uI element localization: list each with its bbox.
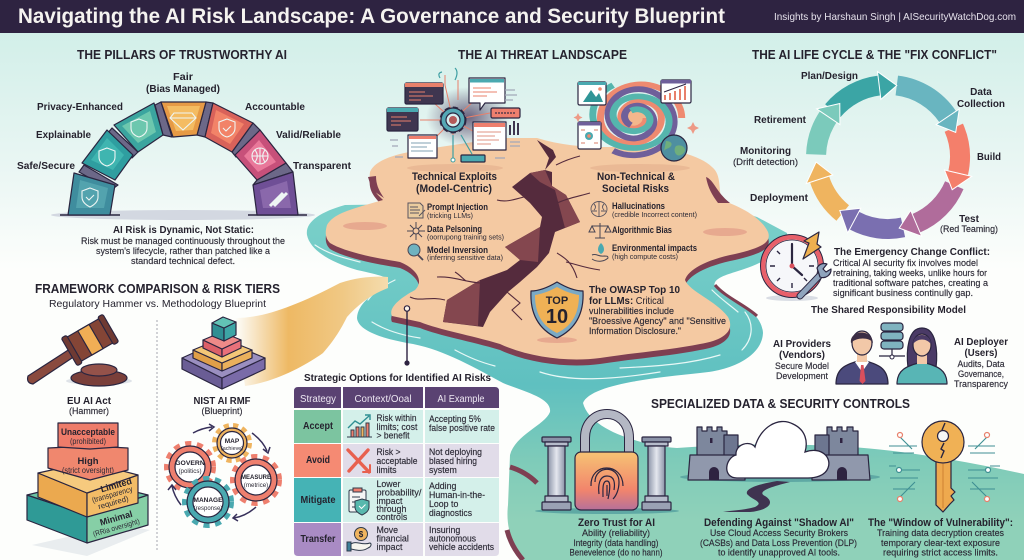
shadow AI text: Defending Against "Shadow AI"	[704, 517, 854, 529]
tier: minimal: (RRia oversight)	[92, 517, 141, 539]
row: mitigate: Mitigate	[300, 495, 336, 506]
AI deployer text	[954, 336, 1009, 389]
zero trust text: Ability (reliability)	[582, 528, 650, 538]
shadow AI text: to identify unapproved AI tools.	[718, 548, 840, 558]
heading: shared responsibility: The Shared Responsibility Model	[811, 304, 966, 316]
column: societal risks	[589, 171, 697, 261]
tier: limited: Limited	[99, 476, 133, 494]
icon: server database	[879, 323, 905, 359]
item: environmental impacts: Environmental impacts	[612, 243, 697, 253]
row: mitigate: Human-in-the-	[429, 490, 485, 500]
icon: top 10 shield	[531, 282, 583, 343]
row: avoid	[294, 444, 499, 477]
life cycle stage labels: Data	[970, 87, 992, 98]
tier: minimal	[27, 480, 148, 543]
item: data poisoning: (oorrupong training sets)	[427, 232, 504, 242]
tier: unacceptable: (prohibited)	[70, 437, 106, 446]
column: technical exploits	[407, 171, 504, 262]
tier: high: High	[77, 456, 99, 467]
item: hallucinations: (credible Incorrect content)	[612, 210, 697, 219]
row: avoid: Avoid	[306, 455, 330, 466]
panel: strategy table	[294, 372, 499, 556]
icon: coin in hand	[347, 528, 371, 551]
NIST AI RMF label: NIST AI RMF	[194, 395, 251, 407]
heading: table: Strategic Options for Identified AI Risks	[304, 372, 491, 384]
icon: rising chart	[347, 415, 372, 437]
life cycle stage labels: Test	[959, 214, 980, 225]
byline: Insights by Harshaun Singh | AISecurityWatchDog.com	[774, 11, 1016, 23]
life cycle stage labels: Monitoring	[740, 146, 791, 157]
shadow AI text	[700, 517, 857, 558]
column: technical exploits: Technical Exploits	[412, 171, 497, 183]
pillar labels: Safe/Secure	[17, 161, 75, 172]
heading: life cycle: THE AI LIFE CYCLE & THE "FIX CONFLICT"	[752, 48, 997, 62]
row: accept: Risk within	[376, 413, 417, 423]
panel: AI threat landscape	[387, 48, 726, 343]
row: mitigate: probability/	[376, 488, 422, 498]
illustration: golden beam to strategy table	[235, 277, 388, 386]
pillar labels: (Bias Managed)	[146, 84, 220, 95]
row: mitigate: through	[376, 504, 406, 514]
row: transfer: financial	[376, 534, 409, 544]
row: transfer: vehicle accidents	[429, 542, 495, 552]
icon: top 10 shield: 10	[546, 306, 568, 328]
row: mitigate: controls	[376, 512, 408, 522]
gear: govern: GOVERN	[175, 460, 205, 467]
tier: limited: (transparency	[91, 484, 134, 505]
AI providers text: Development	[776, 371, 829, 381]
zero trust text: Zero Trust for AI	[578, 517, 655, 529]
EU AI Act label	[67, 395, 111, 416]
dynamic risk note: standard technical defect.	[131, 256, 235, 266]
header bar	[0, 0, 1024, 33]
row: mitigate: impact	[376, 496, 403, 506]
panel: AI life cycle	[733, 48, 1009, 389]
window of vulnerability text: Training data decryption creates	[877, 528, 1005, 538]
item: environmental impacts	[592, 243, 697, 261]
row: transfer: Transfer	[300, 534, 336, 545]
AI providers text: (Vendors)	[779, 349, 825, 361]
AI deployer text: AI Deployer	[954, 336, 1008, 348]
row: mitigate: Adding	[429, 481, 456, 491]
life cycle stage labels: Build	[977, 152, 1001, 163]
pillar labels	[17, 72, 352, 172]
pillar labels: Accountable	[245, 102, 305, 113]
connector pin to table	[404, 306, 410, 366]
gear: govern	[167, 444, 213, 490]
row: avoid: system	[429, 465, 457, 475]
icon: gavel	[28, 314, 132, 386]
gear: measure: MEASURE	[241, 475, 271, 481]
gear: map: (achieve)	[221, 446, 243, 452]
row: avoid: Not deploying	[429, 447, 482, 457]
pillar labels: Transparent	[293, 161, 352, 172]
window of vulnerability text: requiring strict access limits.	[883, 548, 998, 558]
item: prompt injection: Prompt Injection	[427, 202, 488, 212]
NIST gears cycle	[167, 424, 279, 525]
AI providers text: Secure Model	[775, 361, 829, 371]
row: accept: limits; cost	[376, 422, 418, 432]
OWASP text: Information Disclosure."	[589, 326, 681, 336]
shadow AI text: Use Cloud Access Security Brokers	[710, 528, 849, 538]
emergency change conflict text: retraining, taking weeks, unlike hours for	[833, 268, 987, 278]
NIST AI RMF label	[194, 395, 251, 416]
tier: limited: required)	[97, 494, 130, 511]
emergency change conflict text: Critical AI security fix involves model	[833, 258, 978, 268]
item: algorithmic bias: Algorithmic Bias	[612, 225, 672, 235]
tier: minimal: Minimal	[99, 509, 134, 528]
icon: NIST blueprint pyramid	[182, 317, 265, 389]
row: mitigate: Loop to	[429, 499, 458, 509]
panel: pillars of trustworthy AI	[17, 48, 352, 266]
panel: specialized controls	[535, 397, 1013, 558]
icon: top 10 shield: TOP	[546, 295, 568, 307]
OWASP text: "Broessive Agency" and "Sensitive	[589, 316, 726, 326]
tier: high: (strict oversight)	[62, 466, 114, 475]
subheading: framework: Regulatory Hammer vs. Methodology Blueprint	[49, 298, 266, 310]
OWASP text: vulnerabilities include	[589, 306, 674, 316]
life cycle stage labels: (Red Teaming)	[940, 224, 998, 234]
zero trust text: Integrity (data handling)	[574, 538, 659, 548]
gear cycle arrows	[168, 424, 270, 521]
row: accept: Accepting 5%	[429, 414, 481, 424]
window of vulnerability text	[868, 517, 1013, 558]
life cycle stage labels	[733, 71, 1005, 234]
row: mitigate: Lower	[376, 479, 401, 489]
life cycle stage labels: (Drift detection)	[733, 157, 798, 167]
gear: measure	[233, 457, 279, 503]
tier: unacceptable: Unacceptable	[61, 427, 115, 437]
heading: threat landscape: THE AI THREAT LANDSCAPE	[458, 48, 627, 62]
icon: crossed arrow	[348, 450, 370, 472]
gear: map	[215, 426, 249, 460]
tier: unacceptable	[58, 423, 118, 449]
emergency change conflict text: traditional software patches, creating a	[833, 278, 988, 288]
pillar labels: Explainable	[36, 130, 91, 141]
gear: manage: (response)	[194, 506, 222, 512]
pillar labels: Valid/Reliable	[276, 130, 341, 141]
AI deployer text: Audits, Data	[958, 359, 1005, 369]
shadow AI text: (CASBs) and Data Loss Prevention (DLP)	[700, 538, 857, 548]
icon cluster: technical exploits	[387, 68, 520, 162]
row: transfer	[294, 523, 499, 556]
arch of pillar stones	[51, 102, 315, 220]
life cycle ring arrows	[806, 72, 972, 236]
AI deployer text: (Users)	[964, 347, 998, 359]
illustration: cracked land	[326, 138, 769, 365]
dynamic risk note	[81, 224, 285, 266]
gear: manage: MANAGE	[194, 497, 223, 504]
icon: vendor person	[836, 331, 888, 384]
gear: map: MAP	[225, 438, 240, 445]
heading: specialized controls: SPECIALIZED DATA & SECURITY CONTROLS	[651, 397, 910, 411]
item: data poisoning	[407, 222, 504, 242]
OWASP text: for LLMs: Critical	[589, 295, 664, 307]
OWASP text: The OWASP Top 10	[589, 284, 680, 296]
emergency change conflict text	[833, 246, 990, 298]
emergency change conflict text: The Emergency Change Conflict:	[834, 246, 990, 258]
icon: deployer person	[897, 328, 947, 384]
main title: Navigating the AI Risk Landscape: A Governance and Security Blueprint	[18, 5, 725, 28]
dynamic risk note: AI Risk is Dynamic, Not Static:	[113, 224, 254, 236]
icon: coin in hand: $	[359, 530, 364, 539]
AI providers text	[773, 338, 831, 381]
item: environmental impacts: (high compute costs)	[612, 252, 678, 261]
dynamic risk note: system's lifecycle, rather than patched like a	[96, 246, 270, 256]
dynamic risk note: Risk must be managed continuously throughout the	[81, 236, 285, 246]
item: prompt injection	[408, 202, 488, 220]
item: hallucinations: Hallucinations	[612, 201, 665, 211]
tier: high	[48, 446, 128, 480]
heading: framework: FRAMEWORK COMPARISON & RISK TIERS	[35, 282, 280, 296]
row: avoid: acceptable	[376, 456, 418, 466]
life cycle stage labels: Deployment	[750, 193, 809, 204]
gear: manage	[185, 479, 231, 525]
icon: cracked key with circuits	[889, 421, 1000, 512]
pillar labels: Privacy-Enhanced	[37, 102, 123, 113]
icon: clock and wrench	[760, 232, 831, 301]
item: data poisoning: Data Pelsoning	[427, 224, 482, 234]
row: transfer: Move	[376, 525, 398, 535]
icon: lock and pillars	[535, 414, 679, 514]
item: model inversion: (inferring sensitive data)	[427, 253, 503, 262]
row: mitigate	[294, 478, 499, 522]
AI deployer text: Governance,	[958, 369, 1004, 379]
column: societal risks: Societal Risks	[602, 183, 669, 195]
row: avoid: blased hiring	[429, 456, 477, 466]
table header row: Context/Ooal	[354, 394, 412, 405]
row: avoid: limits	[376, 465, 397, 475]
life cycle stage labels: Plan/Design	[801, 71, 858, 82]
life cycle stage labels: Retirement	[754, 115, 807, 126]
icon: castle and cloud	[680, 421, 880, 512]
tier: limited	[38, 462, 138, 517]
row: mitigate: diagnostics	[429, 508, 473, 518]
item: prompt injection: (tricking LLMs)	[427, 211, 473, 220]
row: accept: Accept	[303, 421, 334, 432]
row: transfer: autonomous	[429, 534, 477, 544]
panel: framework comparison	[27, 282, 280, 556]
row: accept: > benefit	[376, 430, 410, 440]
item: model inversion: Model Inversion	[427, 245, 488, 255]
icon cluster: societal risks swirl	[574, 73, 699, 168]
icon: clipboard and shield	[349, 488, 369, 515]
NIST AI RMF label: (Blueprint)	[202, 406, 243, 416]
EU risk tier pyramid	[27, 423, 150, 556]
row: transfer: impact	[376, 542, 403, 552]
zero trust text	[570, 517, 663, 558]
row: accept	[294, 410, 499, 443]
illustration: river and mint ground	[307, 200, 1024, 560]
gear: govern: (politics)	[178, 468, 202, 475]
table header row: AI Example	[438, 394, 485, 405]
item: model inversion	[408, 244, 503, 262]
row: transfer: Insuring	[429, 525, 460, 535]
row: accept: false positive rate	[429, 423, 495, 433]
table header row: Strategy	[300, 394, 336, 405]
zero trust text: Benevelence (do no hann)	[570, 548, 663, 558]
column: societal risks: Non-Technical &	[597, 171, 675, 183]
column: technical exploits: (Model-Centric)	[416, 183, 492, 195]
emergency change conflict text: significant business continully gap.	[833, 288, 973, 298]
gear: measure: (metrice)	[244, 482, 268, 489]
AI providers text: AI Providers	[773, 338, 831, 350]
row: avoid: Risk >	[376, 447, 400, 457]
AI deployer text: Transparency	[954, 379, 1009, 389]
OWASP text	[589, 284, 726, 336]
EU AI Act label: (Hammer)	[69, 406, 109, 416]
life cycle stage labels: Collection	[957, 99, 1005, 110]
table header row	[294, 387, 499, 408]
window of vulnerability text: temporary clear-text exposure	[881, 538, 1000, 548]
pillar labels: Fair	[173, 72, 193, 83]
EU AI Act label: EU AI Act	[67, 395, 111, 407]
heading: pillars: THE PILLARS OF TRUSTWORTHY AI	[77, 48, 287, 62]
item: hallucinations	[591, 201, 697, 219]
